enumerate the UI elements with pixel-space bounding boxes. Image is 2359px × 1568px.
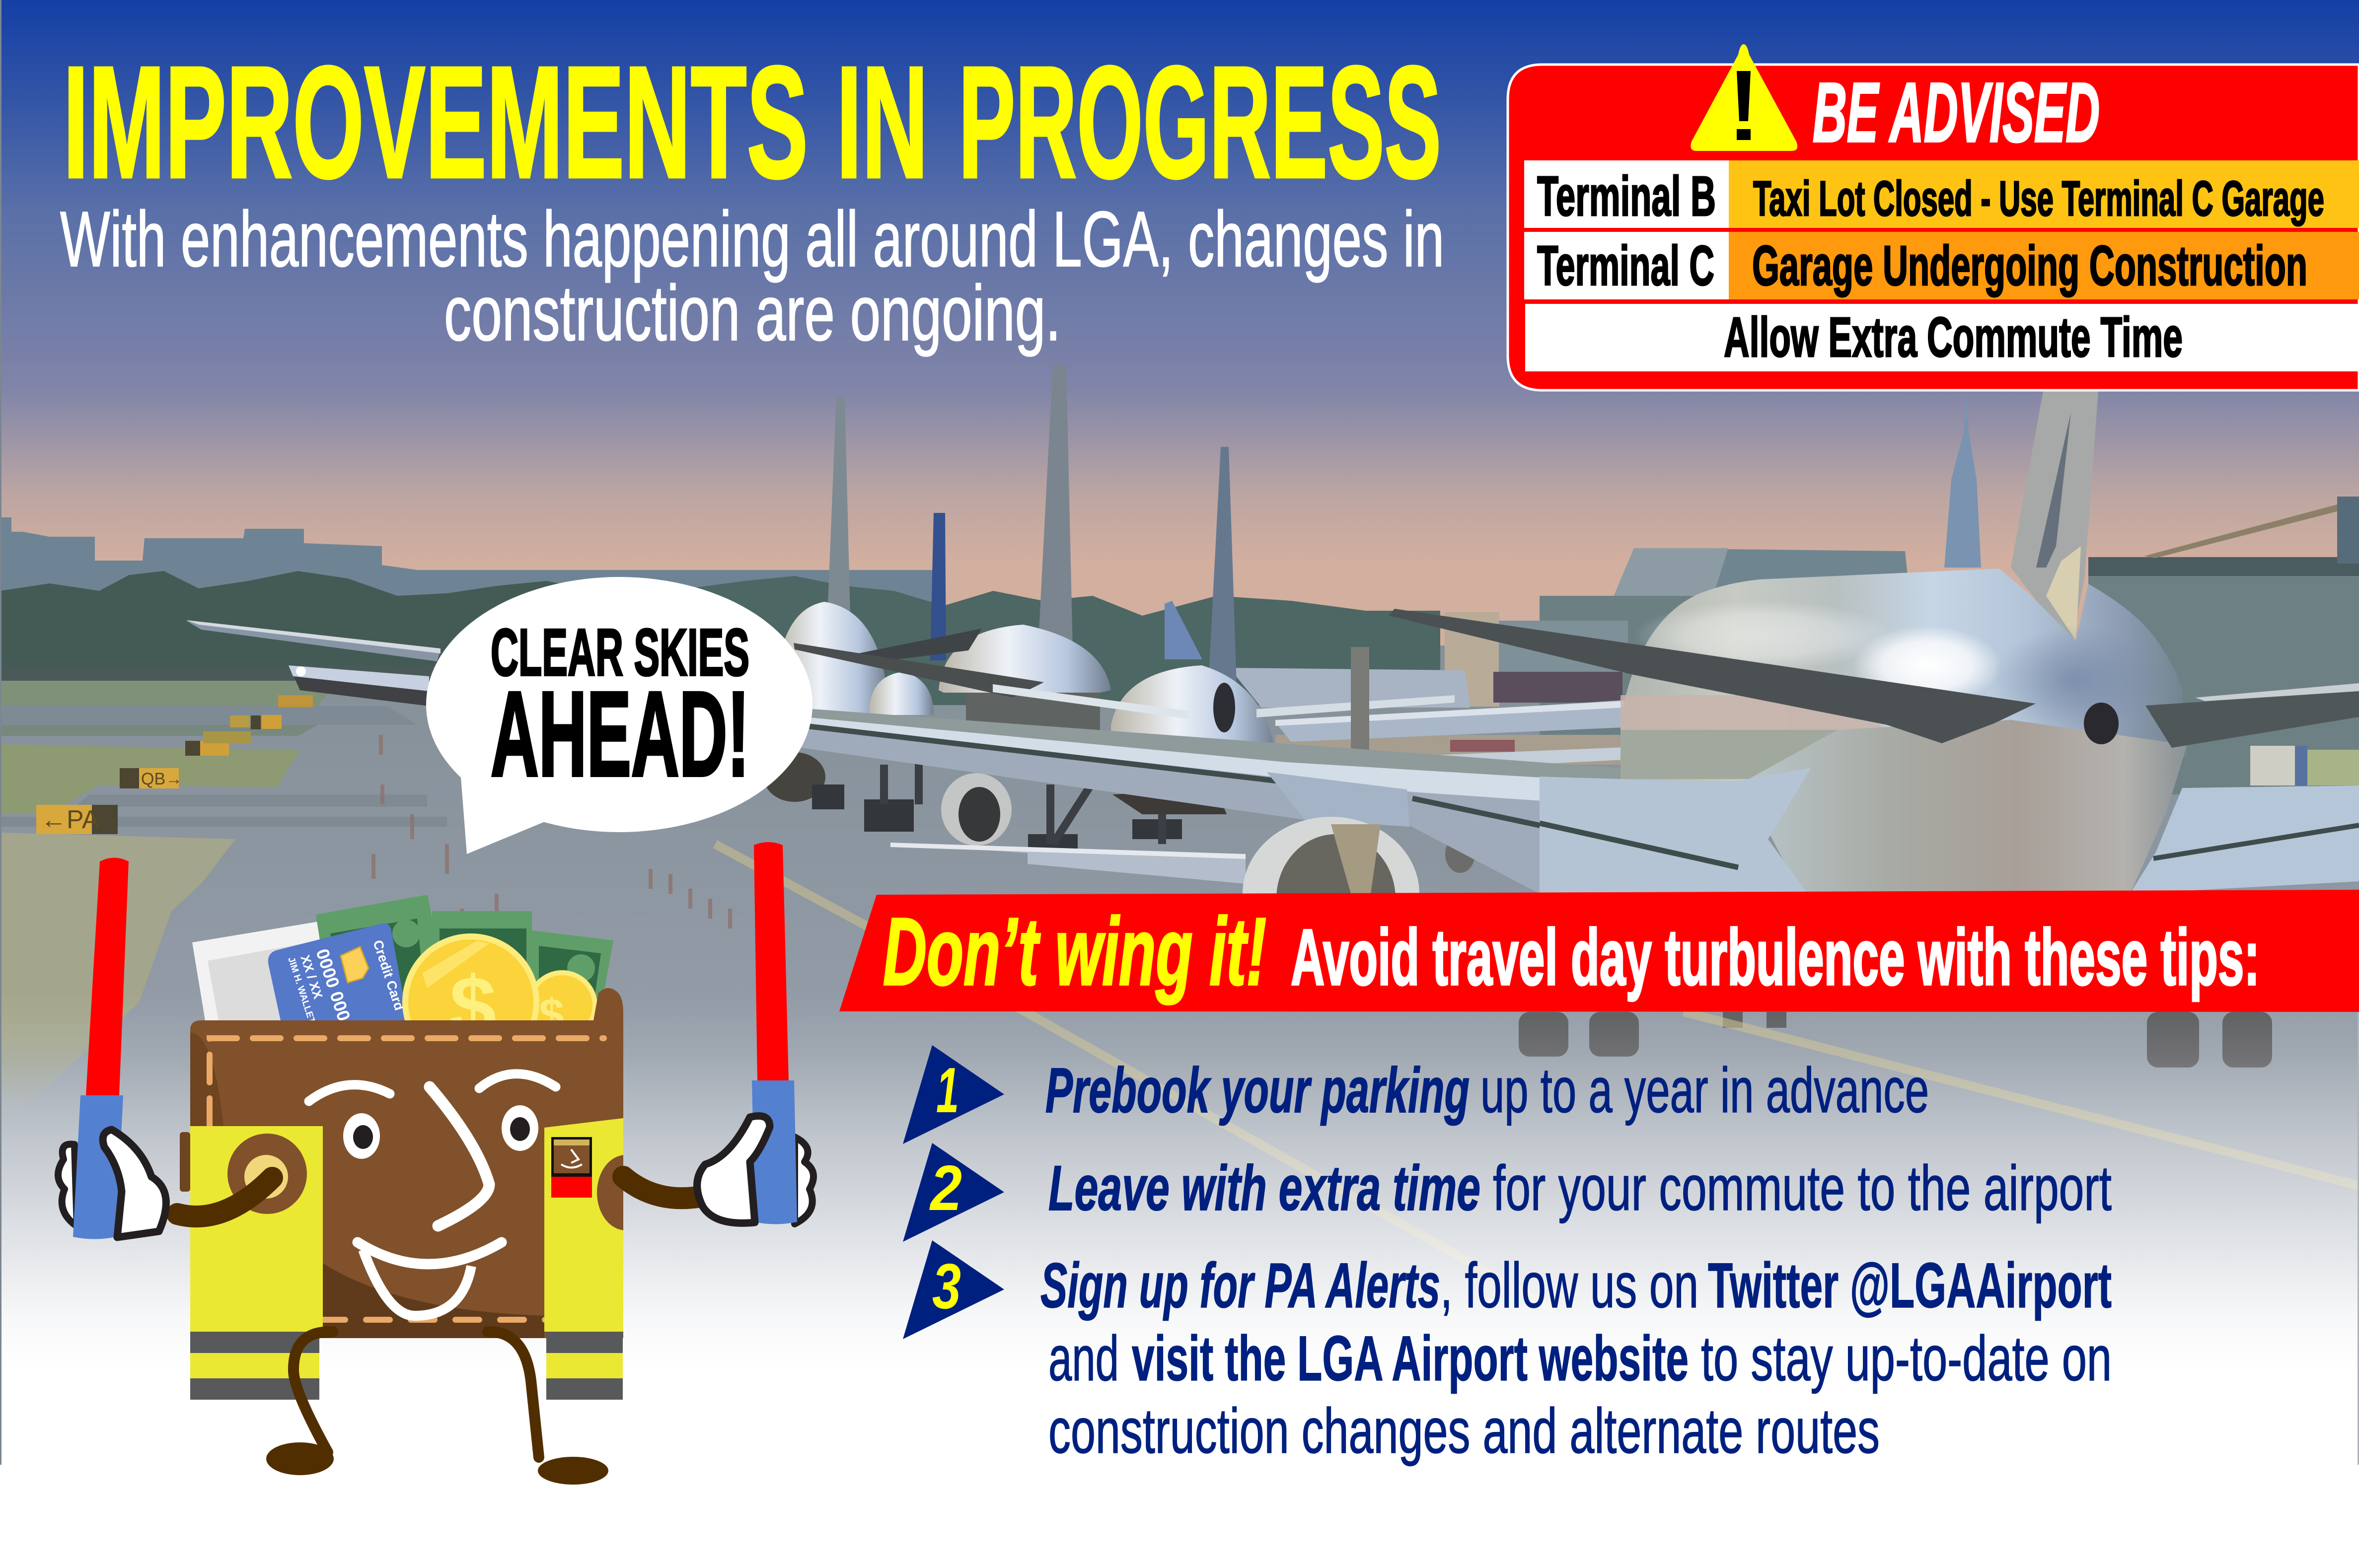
icon: arrow 2 [903, 1143, 1004, 1242]
subtitle: construction are ongoing. [444, 270, 1061, 357]
tip 3: Sign up for PA Alerts [1040, 1250, 1440, 1321]
tip 3: construction changes and alternate routes [1048, 1396, 1880, 1467]
row: terminal C: Terminal C [1537, 234, 1714, 297]
coins: $ [449, 959, 497, 1054]
credit card [268, 924, 405, 1020]
wallet mascot [58, 842, 813, 1485]
tip 1 [903, 1045, 1929, 1144]
title: PROGRESS [958, 33, 1441, 212]
credit card: 0000 0000 [312, 946, 358, 1033]
tip 2 [903, 1143, 2112, 1242]
coins [402, 933, 597, 1020]
tip 2: for your commute to the airport [1493, 1153, 2112, 1224]
icon: arrow 3: 3 [932, 1251, 961, 1322]
tip 3: , follow us on [1440, 1250, 1698, 1321]
tip 1: Prebook your parking [1045, 1055, 1470, 1126]
undercarriage and engines [764, 752, 1475, 884]
feet [266, 1442, 608, 1485]
callout: speech bubble: CLEAR SKIES [491, 616, 749, 690]
right wand and glove [697, 842, 813, 1224]
panel: be advised [1508, 44, 2359, 390]
main wing [802, 709, 1748, 894]
row: terminal C [1524, 232, 2359, 299]
tip 1: up to a year in advance [1480, 1055, 1929, 1126]
wallet contents [192, 895, 613, 1020]
subtitle [60, 196, 1444, 357]
runway signs: ←PA [41, 805, 99, 834]
left wand and glove [58, 858, 166, 1239]
title: IMPROVEMENTS [63, 33, 808, 212]
far background between planes [1229, 612, 1628, 765]
arms and legs [177, 1177, 700, 1457]
row: terminal B [1524, 160, 2359, 228]
title: IN [836, 33, 928, 212]
tip 3: Twitter @LGAAirport [1708, 1250, 2112, 1321]
credit card: Credit Card [370, 938, 407, 1012]
id badge [551, 1137, 592, 1198]
big engine [1243, 817, 1419, 971]
tree line [0, 571, 1440, 705]
icon: arrow 3 [903, 1240, 1004, 1339]
icon: arrow 1 [903, 1045, 1004, 1144]
landing gear [1519, 1012, 2272, 1068]
banner: don't wing it [839, 890, 2359, 1012]
icon: arrow 2: 2 [929, 1152, 962, 1224]
taxiway lines [715, 844, 2359, 1311]
far wings at left [186, 620, 441, 706]
callout: speech bubble: AHEAD! [491, 667, 749, 801]
coins: $ [539, 990, 564, 1040]
tip 2: Leave with extra time [1048, 1153, 1480, 1224]
big plane [1389, 391, 2359, 894]
heading: be advised: BE ADVISED [1813, 66, 2100, 160]
runway signs: QB→ [141, 770, 182, 788]
credit card: JIM H. WALLET [286, 956, 317, 1025]
distant skyline and hangars [0, 392, 2359, 794]
banner: don't wing it: Don’t wing it! [883, 898, 1266, 1005]
tip 3: visit the LGA Airport website [1132, 1323, 1689, 1394]
row: terminal B: Terminal B [1537, 165, 1716, 227]
callout: speech bubble [426, 577, 812, 854]
subtitle: With enhancements happening all around LGA, changes in [60, 196, 1444, 283]
icon: arrow 1: 1 [936, 1055, 959, 1126]
icon: warning triangle [1691, 44, 1797, 151]
grass and roads [0, 681, 447, 1120]
far planes [775, 365, 1624, 771]
wallet face [309, 1074, 556, 1316]
runway signs [36, 695, 313, 834]
credit card: XX / XX [297, 953, 326, 1001]
tip 3 [903, 1240, 2112, 1467]
wallet body [180, 988, 623, 1338]
safety vest [190, 1118, 655, 1400]
tip 3: and [1048, 1323, 1119, 1394]
tip 3: to stay up-to-date on [1701, 1323, 2112, 1394]
runway cones [368, 735, 730, 943]
